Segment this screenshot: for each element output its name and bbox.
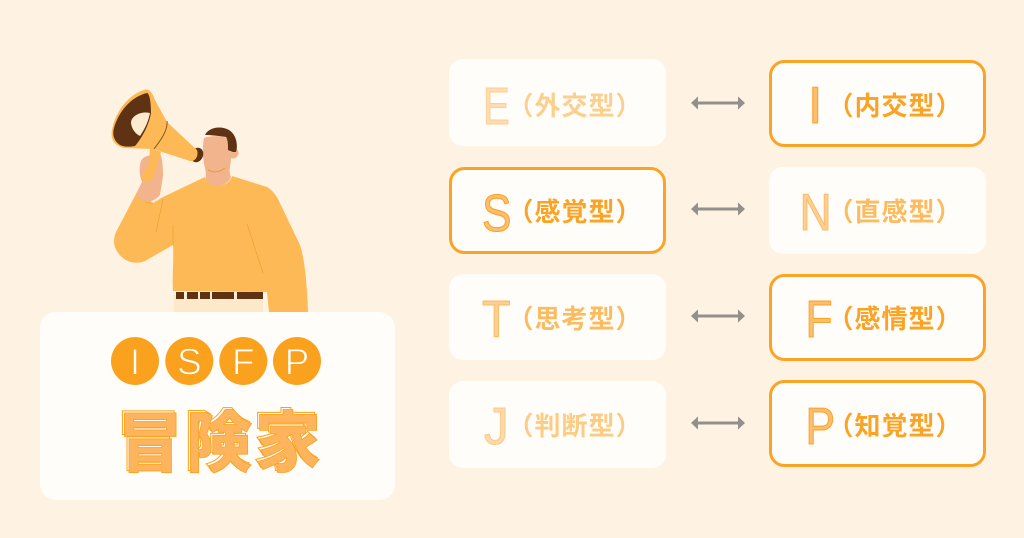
panel: type summary: [40, 312, 395, 500]
card: I introversion: I: [808, 77, 822, 135]
badge: S: [165, 337, 213, 385]
card: I introversion: [770, 62, 984, 146]
megaphone bell interior: [113, 93, 151, 147]
card: T thinking: [449, 274, 666, 360]
card: F feeling: （感情型）: [828, 304, 963, 334]
card: P perceiving: [770, 382, 984, 466]
sweater: [114, 176, 308, 312]
arrow: T to F: [691, 310, 745, 322]
card: N intuition: （直感型）: [828, 197, 963, 227]
card: E extraversion: [449, 59, 666, 146]
arrow: J to P: [691, 416, 745, 430]
illustration: man with megaphone: [112, 89, 308, 313]
row 3: T / F: [449, 274, 984, 360]
megaphone: [112, 89, 206, 182]
title: 冒険家: 冒険家: [117, 406, 324, 480]
arrow: E to I: [691, 96, 745, 110]
badge: I: I: [130, 342, 140, 382]
badge: F: F: [232, 342, 255, 382]
belt: [176, 292, 263, 299]
smile: [208, 168, 225, 172]
megaphone handle: [141, 148, 161, 182]
megaphone band: [154, 121, 167, 149]
card: E extraversion: （外交型）: [508, 91, 643, 121]
megaphone horn: [112, 89, 198, 161]
card: F feeling: F: [806, 291, 833, 349]
card: T thinking: （思考型）: [508, 304, 643, 334]
card: P perceiving: （知覚型）: [828, 411, 963, 441]
card: J judging: [449, 381, 666, 468]
card: I introversion: （内交型）: [828, 91, 963, 121]
ear: [228, 148, 238, 158]
card: T thinking: T: [482, 291, 511, 349]
row 1: E / I: [449, 59, 984, 146]
card: S sensing: S: [482, 185, 511, 243]
arrow: S to N: [691, 202, 745, 216]
card: N intuition: [769, 167, 986, 254]
card: S sensing: （感覚型）: [508, 197, 643, 227]
title: 冒険家: 冒険家: [115, 404, 322, 478]
card: N intuition: N: [800, 184, 832, 242]
hair: [205, 128, 237, 152]
row 2: S / N: [450, 167, 986, 254]
card: J judging: （判断型）: [508, 411, 643, 441]
card: F feeling: [770, 276, 984, 360]
row 4: J / P: [449, 381, 984, 468]
neck and face: [203, 136, 231, 187]
badge: I: [111, 337, 159, 385]
card: S sensing: [450, 168, 664, 252]
sweater fold lines: [137, 192, 263, 273]
badge: P: P: [285, 342, 309, 382]
badge: F: [219, 337, 267, 385]
card: E extraversion: E: [483, 77, 510, 135]
card: J judging: J: [484, 397, 509, 455]
card: P perceiving: P: [806, 398, 835, 456]
megaphone mouthpiece: [188, 146, 206, 164]
badge: S: S: [177, 342, 202, 382]
trousers: [174, 295, 263, 313]
megaphone inner cone: [131, 112, 150, 136]
badge: P: [273, 337, 321, 385]
forearm and hand: [137, 153, 163, 202]
